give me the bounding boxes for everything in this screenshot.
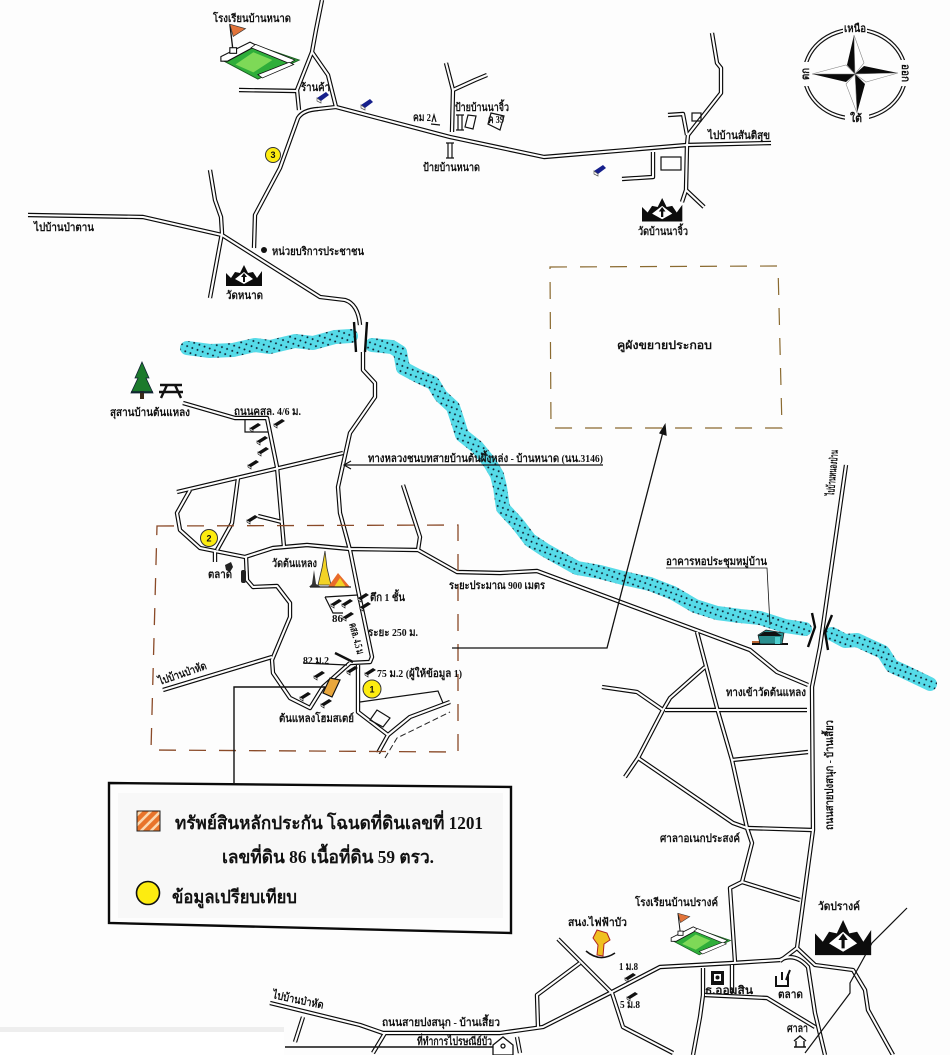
icon: compass bbox=[798, 20, 912, 126]
map labels: ป้ายบ้านหนาด bbox=[423, 161, 480, 174]
river bbox=[187, 336, 930, 684]
map labels: สนง.ไฟฟ้าบัว bbox=[568, 915, 627, 929]
marker numbers: 2 bbox=[206, 534, 212, 544]
map labels: โรงเรียนบ้านปรางค์ bbox=[634, 895, 718, 909]
map labels: ตลาด bbox=[208, 569, 232, 581]
legend connector bbox=[234, 687, 325, 783]
arrow to extension plan bbox=[452, 425, 666, 648]
icon: Wat Ton Laeng stupa bbox=[309, 551, 351, 587]
map labels: คสล. 4.5 ม bbox=[346, 622, 366, 656]
icon: electricity office bbox=[586, 930, 615, 958]
icon: pavilion bbox=[794, 1036, 806, 1047]
icon: market west bbox=[225, 562, 246, 583]
icon: compass: ใต้ bbox=[850, 111, 862, 125]
legend: property text: ทรัพย์สินหลักประกัน โฉนดที่ดินเลขที่ 1201 bbox=[175, 810, 483, 833]
map labels: วัดหนาด bbox=[226, 289, 263, 302]
icon: public service dot bbox=[261, 247, 267, 253]
map labels: ศาลา bbox=[787, 1023, 808, 1035]
dashed extension box bbox=[550, 266, 782, 428]
icon: compass: ออก bbox=[899, 64, 911, 82]
map labels: 5 ม.8 bbox=[620, 999, 640, 1011]
map labels: คม 2 bbox=[413, 112, 431, 124]
marker numbers: 1 bbox=[370, 684, 375, 694]
map labels: วัดต้นแหลง bbox=[272, 557, 317, 570]
icon: post office bbox=[493, 1037, 513, 1055]
heavy marker road bbox=[335, 653, 353, 662]
arrow to highway bbox=[344, 461, 603, 469]
legend: scan shading bbox=[118, 793, 503, 918]
legend panel bbox=[109, 783, 511, 933]
map labels: 1 ม.8 bbox=[619, 961, 638, 973]
map labels: ศาลาอเนกประสงค์ bbox=[660, 832, 740, 845]
map labels: ไปบ้านป่าตาน bbox=[32, 220, 94, 234]
icon: compass: ตก bbox=[800, 68, 812, 80]
dashed path bbox=[385, 712, 450, 758]
map labels: 75 ม.2 (ผู้ให้ข้อมูล 1) bbox=[377, 666, 462, 681]
map labels: 86 bbox=[332, 613, 344, 625]
map labels: วัดปรางค์ bbox=[818, 900, 860, 913]
legend: parcel text: เลขที่ดิน 86 เนื้อที่ดิน 59 ตรว. bbox=[222, 843, 434, 867]
map labels: ร้านค้า bbox=[301, 81, 330, 94]
map labels: ไปบ้านสันติสุข bbox=[706, 128, 770, 143]
map labels: ป้ายบ้านนาจิ้ว bbox=[455, 99, 509, 114]
map labels: 82 ม.2 bbox=[303, 655, 329, 667]
icon: village hall bbox=[752, 630, 788, 644]
bridges bbox=[354, 322, 832, 650]
dashed study area box bbox=[151, 525, 458, 752]
minor thin lines bbox=[245, 113, 907, 1053]
map labels: ธ.ออมสิน bbox=[705, 984, 754, 997]
map labels: ทางหลวงชนบทสายบ้านต้นผึ้งหล่ง - บ้านหนาด (นน.3146) bbox=[368, 450, 603, 465]
icon: Wat Prang bbox=[815, 920, 871, 955]
icon: market east bbox=[776, 970, 790, 986]
map labels: ระยะประมาณ 900 เมตร bbox=[449, 579, 545, 592]
map labels: ไปบ้านป่าหัด bbox=[270, 987, 325, 1012]
icon: cemetery tree and table bbox=[131, 362, 183, 399]
marker numbers: 3 bbox=[270, 150, 276, 160]
legend: comparison text: ข้อมูลเปรียบเทียบ bbox=[172, 887, 297, 909]
map labels: ไปบ้านป่าหัด bbox=[155, 658, 208, 688]
scan shadow band bbox=[0, 1027, 284, 1032]
map labels: วัดบ้านนาจิ้ว bbox=[638, 223, 688, 238]
map labels: ระยะ 250 ม. bbox=[368, 627, 418, 639]
map labels: ตึก 1 ชั้น bbox=[370, 589, 405, 604]
map labels: อาคารหอประชุมหมู่บ้าน bbox=[666, 555, 767, 569]
map labels: ถนนสายปงสนุก - บ้านเสี้ยว bbox=[382, 1014, 500, 1030]
map labels: ตลาด bbox=[778, 989, 803, 1001]
icon: savings bank bbox=[711, 971, 724, 985]
extension label: คูผังขยายประกอบ bbox=[617, 339, 712, 353]
map labels: โรงเรียนบ้านหนาด bbox=[212, 11, 291, 25]
map labels: ต้นแหลงโฮมสเตย์ bbox=[279, 711, 354, 725]
icon: Wat Nat bbox=[226, 265, 262, 286]
white scan patch bbox=[0, 1032, 284, 1055]
map labels: สุสานบ้านต้นแหลง bbox=[110, 406, 190, 420]
markers bbox=[200, 148, 381, 698]
signposts bbox=[431, 115, 464, 158]
map labels: ถนนสายปงสนุก - บ้านเสี้ยว bbox=[821, 720, 837, 830]
map labels: ค 39 bbox=[488, 114, 504, 126]
map labels: ทางเข้าวัดต้นแหลง bbox=[726, 686, 806, 699]
icon: compass: เหนือ bbox=[844, 22, 866, 35]
houses bbox=[247, 92, 638, 1001]
icon: collateral property bbox=[323, 678, 340, 697]
map labels: ไปบ้านหนองป่าน bbox=[823, 449, 841, 497]
marker numbers bbox=[206, 150, 375, 694]
icon: Ban Prang school bbox=[671, 913, 731, 955]
legend: comparison marker bbox=[136, 882, 160, 904]
legend: property swatch bbox=[137, 811, 160, 831]
map labels: หน่วยบริการประชาชน bbox=[272, 245, 364, 258]
icon: Ban Nat school bbox=[221, 24, 299, 79]
icon: Wat Ban Na Chio bbox=[642, 198, 682, 222]
map labels: ที่ทำการไปรษณีย์บัว bbox=[417, 1033, 492, 1048]
map labels: ถนนคสล. 4/6 ม. bbox=[234, 406, 301, 418]
